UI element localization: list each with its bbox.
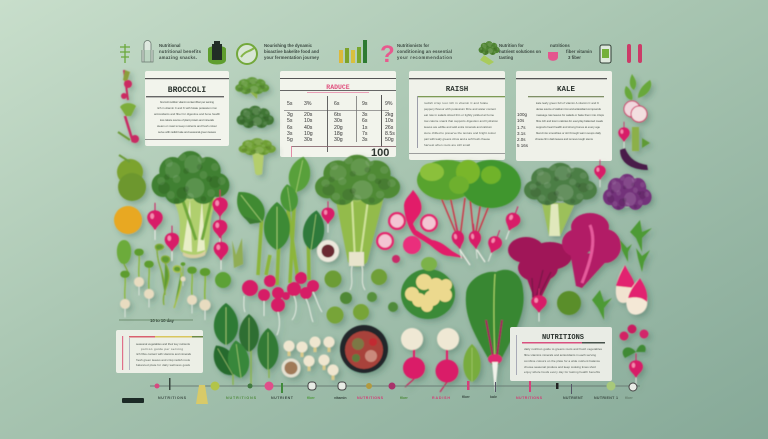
panel: broccoli: [145, 71, 229, 146]
icon: herb: [120, 44, 130, 63]
green balls left: [114, 159, 146, 234]
text block: raish: pair with leafy greens citrus and a soft fresh cheese: [424, 137, 490, 141]
timeline labels: 10 to 10 day: [150, 318, 174, 323]
table values: 3%: [304, 101, 312, 107]
table values: 3s: [287, 131, 293, 137]
text block: broccoli: antioxidants and fiber for digestive and bone health: [154, 112, 220, 116]
text block: broccoli: steam or roast to keep nutrients and fresh colour: [157, 124, 217, 128]
table values: 10s: [385, 118, 394, 124]
caption: fourth: Nutrition for: [499, 43, 524, 48]
vegetable illustrations: [114, 70, 652, 393]
table values: 10s: [304, 118, 313, 124]
icon: pink stacks: [627, 44, 642, 63]
caption: third: conditioning an essential: [397, 49, 452, 54]
timeline labels: NUTRIENT: [563, 396, 584, 400]
timeline labels: kale: [490, 395, 497, 399]
caption: first: amazing snacks.: [159, 55, 197, 60]
broccoli large left: [152, 151, 229, 258]
table values: 3s: [362, 137, 368, 143]
table values: 3s: [362, 112, 368, 118]
timeline markers: [154, 378, 637, 404]
table values: 5g: [287, 137, 293, 143]
broccoli large centre: [315, 155, 400, 290]
caption: third: Nutritionists for: [397, 43, 430, 48]
mushroom cluster: [284, 336, 338, 380]
text block: broccoli: low calorie source of plant protein and minerals: [160, 118, 215, 122]
margin numbers: 100g: [517, 112, 528, 117]
table values: 20g: [334, 125, 343, 131]
text block: raish: store chilled to preserve the texture and bright colour: [424, 131, 496, 135]
icon: small broccoli: [479, 41, 500, 65]
caption: first: nutritional benefits: [159, 49, 202, 54]
text block: broccoli: serve with radish kale and seasonal green leaves: [158, 130, 217, 134]
text block: kale: blend into smoothies or stir through warm soups daily: [536, 131, 602, 135]
table values: 30g: [334, 137, 343, 143]
timeline labels: NUTRITIONS: [226, 396, 257, 400]
timeline labels: fiber: [400, 396, 408, 400]
table values: 8.5s: [385, 131, 395, 137]
range marker: [119, 319, 193, 321]
text block: raish: peppery flavour with potassium fibre and water content: [424, 107, 496, 111]
text block: raish: radish crisp root rich in vitamin C and folate: [424, 101, 488, 105]
text block: kale: supports heart health and strong bones at every age: [536, 125, 600, 129]
white and pink radish pairs: [401, 328, 459, 392]
margin numbers: 5 16s: [517, 143, 529, 148]
timeline labels: [122, 318, 633, 403]
text block: lower left note: fresh green leaves and crisp radish roots: [136, 358, 191, 362]
heading: kale: KALE: [557, 86, 575, 94]
green chard leaf: [466, 270, 524, 393]
leafy radish greens: [417, 160, 521, 265]
panel: lower left note: [116, 330, 203, 373]
caption: second: bioactive bakelite food and: [264, 49, 319, 54]
small bowl of herbs: [317, 240, 339, 262]
small broccoli trio: [235, 77, 276, 175]
table values: 30s: [304, 137, 313, 143]
caption: fourth: nutrient solutions on: [499, 49, 541, 54]
icon: hand: [142, 41, 153, 62]
small right herbs: [592, 220, 652, 320]
green moss balls: [324, 269, 581, 324]
table values: 6s: [287, 125, 293, 131]
icon: pink bowl: [548, 52, 558, 61]
text block: raish: leaves are edible and add extra minerals and calcium: [424, 125, 493, 129]
icon: bar chart: [339, 40, 367, 63]
number: 100: 100: [371, 147, 389, 159]
heading: broccoli: BROCCOLI: [168, 86, 206, 95]
heading: nutritions: NUTRITIONS: [542, 334, 584, 342]
cauliflower: [401, 257, 455, 319]
timeline labels: NUTRITIONS: [357, 396, 384, 400]
table values: 5s: [287, 118, 293, 124]
margin numbers: 3.1s: [517, 131, 526, 136]
text block: broccoli: broccoli nutrition vitamin content fiber per serving: [160, 100, 214, 104]
radish slices and roots: [376, 160, 606, 264]
caption: fifth: nutritions: [550, 43, 570, 48]
text block: lower left note: balanced plate for daily wellness goals: [136, 363, 191, 367]
timeline labels: NUTRITIONS: [516, 396, 543, 400]
leafy bunch with radishes: [229, 155, 327, 335]
table values: 50g: [385, 137, 394, 143]
small seed bowl: [282, 358, 300, 378]
radishes left: [147, 190, 335, 270]
margin numbers: 2.0s: [517, 137, 526, 142]
table values: 2kg: [385, 112, 393, 118]
text block: kale: choose firm dark leaves and remove tough stems: [535, 137, 594, 141]
text block: raish: eat raw in salads sliced thin or lightly pickled at home: [424, 113, 494, 117]
table values: 9s: [362, 101, 368, 107]
panel: radish table: [280, 71, 396, 159]
magenta chard: [508, 213, 621, 322]
table values: 1s: [362, 125, 368, 131]
timeline labels: NUTRITIONS: [158, 396, 187, 400]
header strip of icons and captions: [120, 40, 642, 68]
text block: lower left note: portion guide per serving: [141, 347, 183, 351]
broccoli large right: [524, 163, 597, 236]
timeline labels: fiber: [307, 396, 315, 400]
text block: nutritions: enjoy whole foods every day for lasting health benefits: [524, 370, 601, 374]
caption: second: your fermentation journey: [264, 55, 320, 60]
table values: 6s: [362, 118, 368, 124]
small green leaf: [463, 344, 481, 382]
timeline labels: RADISH: [432, 396, 450, 400]
caption: fourth: tasting: [499, 55, 513, 60]
table values: 30s: [334, 118, 343, 124]
timeline labels: fiber: [625, 396, 633, 400]
text block: nutritions: combine colours on the plate for a wide nutrient balance: [524, 359, 600, 363]
dark bowl of salad: [340, 325, 388, 373]
timeline labels: NUTRIENT: [271, 396, 294, 400]
text block: kale: kale leafy green full of vitamin A vitamin C and K: [536, 101, 599, 105]
table values: 6s: [334, 101, 340, 107]
text block: nutritions: fibre vitamins minerals and antioxidants in each serving: [524, 353, 596, 357]
purple cauliflower: [603, 174, 652, 210]
icon: question mark: ?: [380, 41, 395, 68]
heading: raish: RAISH: [446, 86, 468, 94]
timeline labels: vitamin: [334, 396, 347, 400]
right edge items: [618, 74, 651, 170]
table values: 7s: [362, 131, 368, 137]
table values: 18g: [334, 131, 343, 137]
left edge beets: [118, 70, 139, 162]
table values: 3g: [287, 112, 293, 118]
table values: 6ts: [334, 112, 341, 118]
margin numbers: 1.7s: [517, 125, 526, 130]
text block: lower left note: rich fibre content with vitamins and minerals: [136, 352, 192, 356]
panel: kale: [516, 71, 612, 161]
text block: raish: low calorie snack that supports digestion and hydration: [424, 119, 498, 123]
caption: first: Nutritional: [159, 43, 180, 48]
text block: nutritions: daily nutrition guide to greens roots and fresh vegetables: [524, 347, 603, 351]
text block: lower left note: seasonal vegetables and their key nutrients: [136, 342, 191, 346]
sprouts: [117, 238, 243, 320]
timeline: [119, 318, 640, 404]
heading: radish table: RADUCE: [326, 84, 350, 91]
margin numbers: 10s: [517, 118, 525, 123]
text block: kale: fibre rich and low in calories for everyday balanced meals: [536, 119, 604, 123]
caption: fifth: fiber vitamin: [566, 49, 592, 54]
text block: raish: harvest when roots are still small: [424, 143, 470, 147]
panel: nutritions: [510, 327, 612, 381]
text block: nutritions: choose seasonal produce and keep cooking times short: [524, 365, 596, 369]
icon: bottle: [600, 45, 611, 63]
icon: jar: [208, 41, 226, 64]
table values: 5s: [287, 101, 293, 107]
panel: raish: [409, 71, 505, 160]
spinach lower left: [207, 303, 279, 385]
caption: third: your recommendation: [397, 55, 452, 60]
pink and white radishes: [616, 265, 648, 387]
table values: 20s: [304, 112, 313, 118]
text block: kale: massage raw leaves for salads or bake them into crisps: [536, 113, 605, 117]
caption: fifth: 3 fiber: [568, 55, 581, 60]
table values: 9%: [385, 101, 393, 107]
text block: kale: dense source of calcium iron and antioxidant compounds: [536, 107, 602, 111]
table values: 40s: [304, 125, 313, 131]
table values: 10g: [304, 131, 313, 137]
timeline labels: NUTRIENT 1: [594, 396, 618, 400]
icon: circle leaf: [237, 44, 257, 64]
table values: 26s: [385, 125, 394, 131]
text block: broccoli: rich in vitamin C and K with folate potassium iron: [157, 106, 217, 110]
caption: second: Nourishing the dynamic: [264, 43, 313, 48]
timeline labels: fiber: [462, 395, 470, 399]
